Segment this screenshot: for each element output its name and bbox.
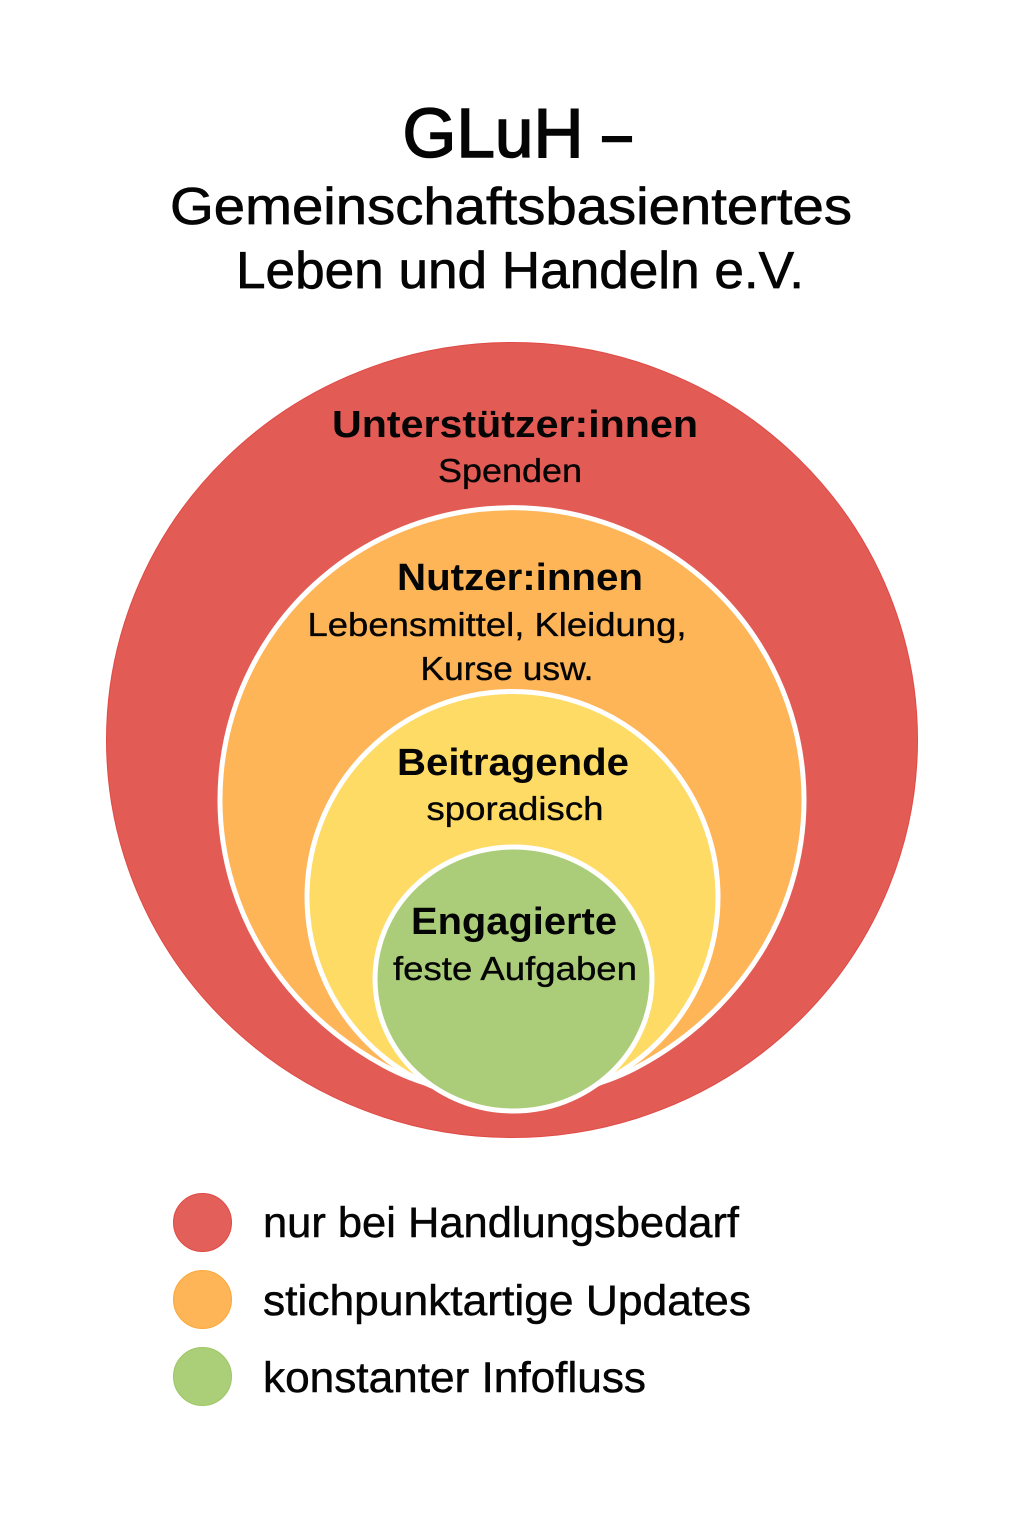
title: Gemeinschaftsbasientertes — [170, 178, 852, 236]
circle: Nutzer:innen: Kurse usw. — [420, 650, 594, 687]
legend item: orange — [174, 1270, 751, 1328]
legend item: red: nur bei Handlungsbedarf — [263, 1199, 740, 1247]
title: GLuH — [402, 94, 584, 172]
legend — [174, 1194, 751, 1406]
circle: Nutzer:innen: Lebensmittel, Kleidung, — [308, 606, 686, 643]
circle: Unterstützer:innen: Spenden — [438, 452, 582, 489]
circle: Unterstützer:innen — [106, 342, 918, 1138]
circle: Beitragende: Beitragende — [397, 742, 629, 784]
legend item: green — [174, 1348, 646, 1406]
legend item: red — [174, 1194, 740, 1252]
legend item: orange: stichpunktartige Updates — [263, 1277, 751, 1325]
circle: Engagierte — [375, 847, 652, 1111]
circle: Nutzer:innen — [220, 508, 804, 1087]
circle: Unterstützer:innen: Unterstützer:innen — [332, 404, 698, 446]
nested circle diagram — [106, 342, 918, 1138]
circle: Beitragende: sporadisch — [426, 790, 604, 827]
title — [170, 94, 852, 300]
legend item: green: konstanter Infofluss — [263, 1354, 646, 1402]
circle: Engagierte: feste Aufgaben — [393, 950, 637, 987]
circle: Engagierte: Engagierte — [411, 901, 617, 943]
title: Leben und Handeln e.V. — [236, 242, 804, 300]
circle: Nutzer:innen: Nutzer:innen — [397, 557, 643, 599]
circle: Beitragende — [307, 692, 718, 1102]
title: – — [602, 94, 632, 172]
